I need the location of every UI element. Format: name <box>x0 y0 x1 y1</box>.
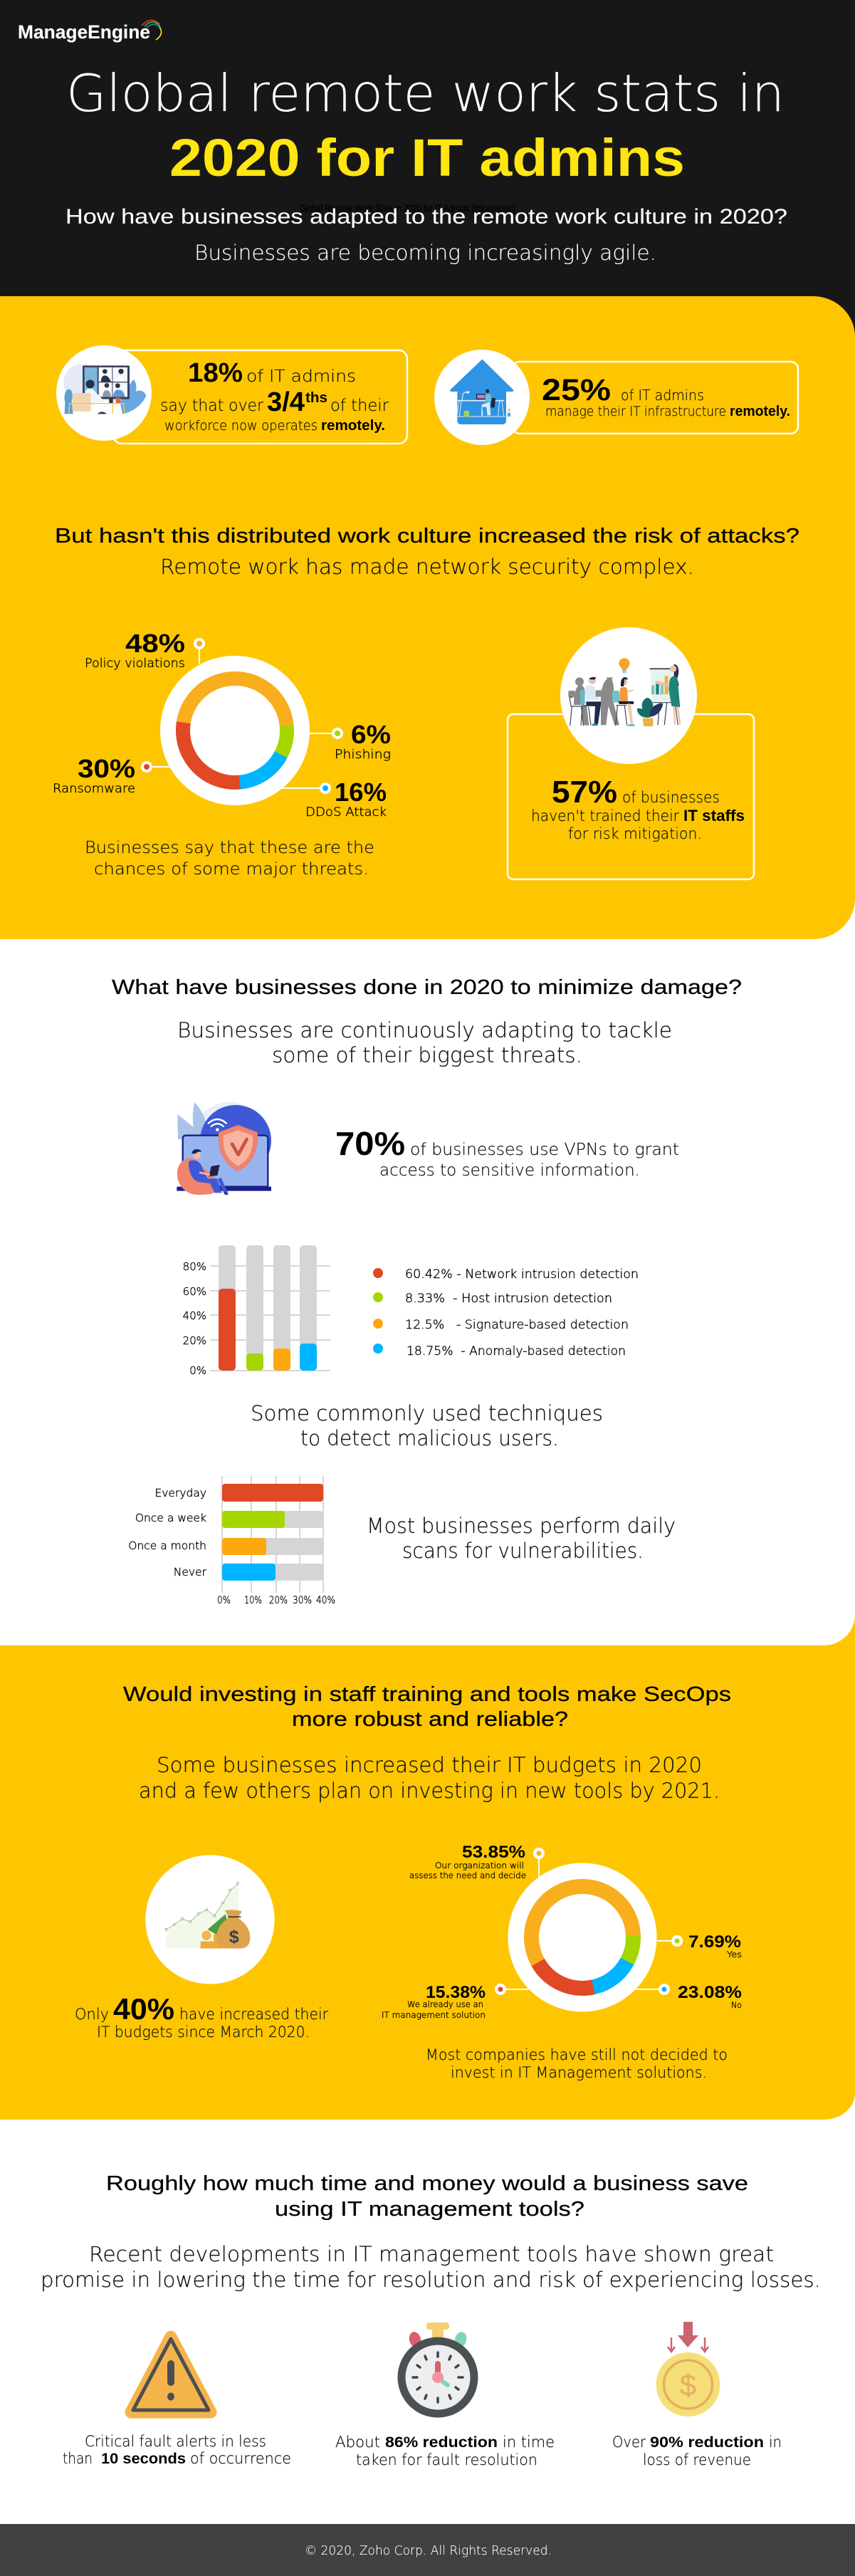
caption: daily scans <box>367 1514 676 1563</box>
caption: not decided: Most companies have still not decided to <box>426 2046 728 2063</box>
text: 90% reduction: loss of revenue <box>643 2451 751 2468</box>
stat: 70% VPN: 70% <box>335 1125 405 1162</box>
legend: detection techniques: 60.42% - Network intrusion detection <box>405 1267 639 1281</box>
text: 86% reduction: About <box>335 2434 380 2451</box>
label: phishing: 6% <box>351 720 391 749</box>
title: 2020 for IT admins <box>169 128 685 187</box>
bar chart: scan frequency <box>128 1476 335 1606</box>
subheading: adapting <box>177 1018 672 1067</box>
label: assess the need: 53.85% <box>462 1843 525 1862</box>
text: critical fault alerts: of occurrence <box>190 2450 291 2467</box>
subtitle question: How have businesses adapted to the remote work culture in 2020? <box>65 205 787 229</box>
donut chart: major threats <box>53 629 391 820</box>
label: phishing <box>335 720 391 762</box>
subheading: adapting: some of their biggest threats. <box>272 1043 582 1067</box>
label: already use: We already use an <box>407 1999 483 2009</box>
text: 90% reduction <box>612 2434 782 2468</box>
stat: 40% budgets <box>75 1992 328 2041</box>
background: white mitigation panel <box>0 890 855 1645</box>
subheading: recent developments: Recent developments in IT management tools have shown great <box>89 2242 774 2266</box>
text: 86% reduction: taken for fault resolution <box>356 2451 537 2468</box>
label: already use: 15.38% <box>426 1983 486 2002</box>
caption: detection techniques <box>251 1401 603 1450</box>
heading: investing <box>123 1683 731 1731</box>
caption: major threats <box>85 839 374 879</box>
heading: investing: more robust and reliable? <box>292 1708 568 1731</box>
label: phishing: Phishing <box>335 748 391 762</box>
bar chart: scan frequency: Once a week <box>135 1512 206 1524</box>
title: Global remote work stats in <box>66 63 785 123</box>
stat card: 25% of IT admins <box>434 350 798 445</box>
stat: 40% budgets: Only <box>75 2006 109 2023</box>
subheading: recent developments: promise in lowering the time for resolution and risk of experiencing losses. <box>41 2268 821 2292</box>
stat: 40% budgets: IT budgets since March 2020. <box>97 2023 310 2041</box>
stat card: 18% of IT admins: workforce now operates <box>164 418 318 434</box>
bar chart: detection techniques <box>183 1245 330 1377</box>
text: 25%: 25% <box>542 373 611 407</box>
panel: header <box>0 0 855 342</box>
stat card: 18% of IT admins: of their <box>330 397 389 415</box>
caption: major threats: Businesses say that these are the <box>85 839 374 857</box>
label: ddos attack: DDoS Attack <box>305 805 387 820</box>
text: 86% reduction <box>335 2434 555 2468</box>
stat card: 57% untrained: for risk mitigation. <box>568 825 702 842</box>
text: critical fault alerts <box>63 2433 291 2467</box>
text: 57%: 57% <box>552 775 617 810</box>
legend: detection techniques <box>373 1267 639 1358</box>
logo: ManageEngine: ManageEngine <box>18 21 150 43</box>
subtitle statement: Businesses are becoming increasingly agile. <box>194 241 656 265</box>
label: ransomware <box>53 754 135 796</box>
subheading: budgets: and a few others plan on investing in new tools by 2021. <box>139 1779 720 1803</box>
label: ddos attack: 16% <box>335 777 387 807</box>
subheading: network security: Remote work has made network security complex. <box>160 555 694 579</box>
stat: 70% VPN: access to sensitive information. <box>379 1161 640 1180</box>
bar chart: scan frequency: Everyday <box>154 1487 206 1499</box>
text: critical fault alerts: than <box>63 2450 93 2467</box>
label: already use <box>382 1983 486 2020</box>
bar chart: scan frequency: 30% <box>293 1595 312 1606</box>
subheading: recent developments <box>41 2242 821 2292</box>
label: ddos attack <box>305 777 387 820</box>
text: 86% reduction: 86% reduction <box>385 2434 498 2451</box>
text: 18%: 18% <box>188 358 243 388</box>
label: policy violations: Policy violations <box>85 656 185 671</box>
caption: major threats: chances of some major threats. <box>94 860 369 879</box>
background: yellow investing panel <box>0 1602 855 2120</box>
hidden page caption: Global Remote Work Stats in 2020 for IT Admins [Infographic] <box>300 202 515 214</box>
label: policy violations <box>85 629 185 671</box>
bar chart: scan frequency: 0% <box>217 1595 231 1606</box>
heading: minimize damage: What have businesses done in 2020 to minimize damage? <box>112 976 742 999</box>
stat: 70% VPN <box>335 1125 679 1180</box>
caption: detection techniques: to detect malicious users. <box>300 1426 559 1450</box>
label: no <box>678 1983 742 2010</box>
footer: © 2020, Zoho Corp. All Rights Reserved. <box>305 2543 552 2558</box>
label: no: 23.08% <box>678 1983 742 2002</box>
label: no: No <box>731 2000 742 2010</box>
icon: stopwatch <box>397 2323 478 2418</box>
label: yes <box>688 1932 742 1959</box>
stat card: 18% of IT admins: remotely. <box>321 418 385 434</box>
label: assess the need: assess the need and decide <box>409 1870 526 1880</box>
label: assess the need <box>409 1843 526 1880</box>
bar chart: detection techniques: 0% <box>189 1364 206 1377</box>
icon: video call <box>63 364 146 414</box>
label: yes: Yes <box>727 1949 742 1959</box>
subheading: adapting: Businesses are continuously adapting to tackle <box>177 1018 672 1042</box>
stat card: 18% of IT admins: say that over <box>160 397 264 415</box>
stat: 40% budgets: have increased their <box>179 2006 328 2023</box>
icon: coin with down arrows <box>656 2322 720 2417</box>
bar chart: scan frequency: Once a month <box>128 1539 206 1552</box>
label: already use: IT management solution <box>382 2010 486 2020</box>
caption: daily scans: scans for vulnerabilities. <box>402 1539 644 1563</box>
bar chart: scan frequency: 20% <box>269 1595 288 1606</box>
icon: money growth: $ <box>229 1927 239 1947</box>
footer <box>0 2524 855 2576</box>
stat card: 18% of IT admins <box>56 345 407 444</box>
bar chart: scan frequency: 10% <box>244 1595 262 1606</box>
stat: 40% budgets: 40% <box>113 1992 174 2026</box>
label: policy violations: 48% <box>125 629 185 658</box>
stat card: 57% untrained: IT staffs <box>683 807 745 824</box>
bar chart: detection techniques: 80% <box>183 1260 206 1273</box>
stat card: 57% untrained <box>508 627 754 879</box>
bar chart: detection techniques: 40% <box>183 1309 206 1322</box>
stat: 70% VPN: of businesses use VPNs to grant <box>410 1141 679 1159</box>
text: 90% reduction: Over <box>612 2434 646 2451</box>
text: 90% reduction: 90% reduction <box>650 2434 764 2451</box>
heading: investing: Would investing in staff training and tools make SecOps <box>123 1683 731 1706</box>
title <box>66 63 785 187</box>
icon: home office <box>450 360 513 424</box>
icon: VPN <box>177 1102 271 1195</box>
heading: risk of attacks: But hasn't this distributed work culture increased the risk of attacks? <box>55 525 799 548</box>
legend: detection techniques: 18.75% - Anomaly-based detection <box>406 1344 626 1358</box>
stat card: 25% of IT admins: remotely. <box>730 404 790 419</box>
icon: money growth <box>145 1855 275 1984</box>
caption: not decided: invest in IT Management solutions. <box>451 2064 707 2081</box>
stat card: 57% untrained: haven't trained their <box>531 807 679 824</box>
caption: daily scans: Most businesses perform daily <box>367 1514 676 1538</box>
caption: not decided <box>426 2046 728 2081</box>
subheading: budgets <box>139 1753 720 1803</box>
stat card: 25% of IT admins: of IT admins <box>621 387 704 404</box>
icon: coin with down arrows: $ <box>680 2368 696 2402</box>
stat card: 18% of IT admins: of IT admins <box>246 367 356 386</box>
label: assess the need: Our organization will <box>435 1860 524 1870</box>
heading: time and money <box>106 2172 748 2221</box>
icon: training session <box>568 658 680 726</box>
text: critical fault alerts: 10 seconds <box>101 2451 186 2467</box>
stat card: 57% untrained: of businesses <box>622 789 720 806</box>
heading: time and money: using IT management tools? <box>275 2198 584 2221</box>
background: yellow adaption panel <box>0 296 855 939</box>
heading: time and money: Roughly how much time and money would a business save <box>106 2172 748 2195</box>
bar chart: scan frequency: 40% <box>316 1595 335 1606</box>
label: yes: 7.69% <box>688 1932 741 1952</box>
text: critical fault alerts: Critical fault alerts in less <box>85 2433 266 2450</box>
bar chart: detection techniques: 20% <box>183 1334 206 1347</box>
legend: detection techniques: 8.33% - Host intrusion detection <box>405 1292 612 1305</box>
text: 90% reduction: in <box>769 2434 782 2451</box>
icon: warning triangle <box>131 2337 211 2412</box>
stat card: 18% of IT admins: 3/4 <box>267 387 305 417</box>
donut chart: IT management investment <box>382 1843 742 2020</box>
subheading: budgets: Some businesses increased their IT budgets in 2020 <box>157 1753 702 1777</box>
stat card: 18% of IT admins: ths <box>305 390 327 406</box>
label: ransomware: 30% <box>78 754 135 783</box>
label: ransomware: Ransomware <box>53 782 135 796</box>
stat card: 25% of IT admins: manage their IT infrastructure <box>545 404 726 419</box>
bar chart: scan frequency: Never <box>174 1566 207 1578</box>
bar chart: detection techniques: 60% <box>183 1285 206 1298</box>
text: 86% reduction: in time <box>503 2434 555 2451</box>
legend: detection techniques: 12.5% - Signature-based detection <box>405 1318 629 1331</box>
caption: detection techniques: Some commonly used techniques <box>251 1401 603 1425</box>
